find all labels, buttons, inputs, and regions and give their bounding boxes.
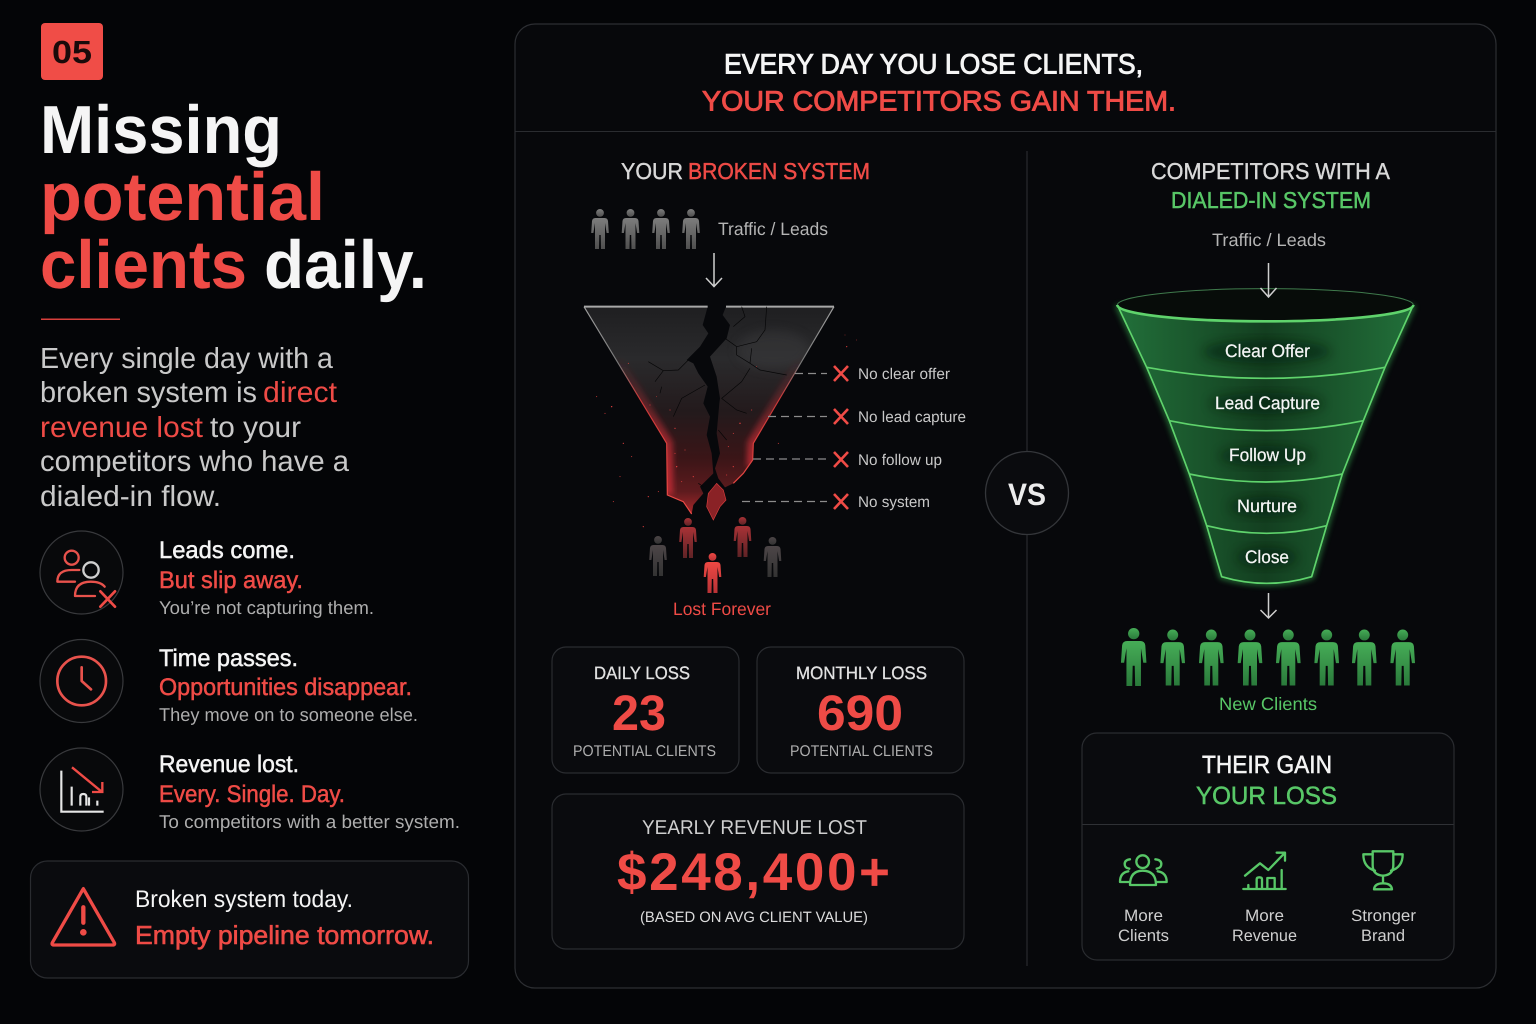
- item: revenue lost: Every. Single. Day.: [159, 781, 345, 808]
- main panel: [515, 24, 1496, 988]
- label: new clients: New Clients: [1219, 694, 1317, 714]
- traffic people, grey: [591, 209, 700, 249]
- panel heading: YOUR COMPETITORS GAIN THEM.: [702, 86, 1176, 116]
- title: Missing: [40, 92, 282, 168]
- arrow: out of green funnel: [1260, 593, 1276, 618]
- stat card: yearly revenue lost: [552, 794, 964, 949]
- label: traffic leads: Traffic / Leads: [718, 219, 828, 239]
- callout: warning: Broken system today.: [135, 886, 353, 913]
- lost people: [649, 517, 781, 593]
- intro paragraph: dialed-in flow.: [40, 481, 221, 513]
- item: opportunities disappear: Opportunities disappear.: [159, 674, 412, 701]
- heading: broken system: YOUR: [621, 158, 683, 184]
- stat card: yearly revenue lost: $248,400+: [617, 843, 890, 902]
- item: revenue lost: To competitors with a better system.: [159, 811, 460, 832]
- panel heading: EVERY DAY YOU LOSE CLIENTS,: [724, 48, 1143, 80]
- intro paragraph: direct: [263, 377, 337, 409]
- section number badge: 05: [52, 34, 92, 70]
- broken funnel: [584, 307, 857, 527]
- funnel stages: Lead Capture: [1215, 393, 1320, 413]
- intro paragraph: Every single day with a: [40, 343, 334, 375]
- label: lost forever: Lost Forever: [673, 599, 771, 619]
- funnel stages: Nurture: [1237, 496, 1297, 516]
- title: clients: [40, 227, 247, 303]
- intro paragraph: to your: [210, 412, 301, 444]
- panel: their gain: THEIR GAIN: [1202, 751, 1332, 779]
- funnel stages: [1215, 341, 1320, 567]
- panel: their gain: Clients: [1118, 927, 1169, 945]
- funnel stages: Close: [1245, 547, 1289, 567]
- stat card: daily loss: DAILY LOSS: [594, 663, 690, 683]
- panel: their gain: Brand: [1361, 927, 1405, 945]
- stat card: daily loss: 23: [612, 685, 666, 741]
- leak reasons: No clear offer: [858, 366, 950, 383]
- item: leads slip away: You’re not capturing them.: [159, 597, 374, 618]
- item: leads slip away: [40, 531, 374, 618]
- funnel stages: Clear Offer: [1225, 341, 1310, 361]
- title: [40, 92, 427, 303]
- stat card: monthly loss: POTENTIAL CLIENTS: [790, 743, 933, 760]
- title: daily.: [264, 227, 427, 303]
- green funnel: [1117, 289, 1413, 583]
- panel: their gain: More: [1124, 907, 1163, 925]
- stat card: monthly loss: MONTHLY LOSS: [796, 663, 927, 683]
- intro paragraph: broken system is: [40, 377, 257, 409]
- leak reasons: No system: [858, 494, 930, 511]
- icon: clock: [40, 640, 123, 722]
- icon: falling chart: [40, 748, 123, 831]
- stat card: daily loss: [552, 647, 739, 773]
- item: leads slip away: Leads come.: [159, 537, 295, 564]
- heading: broken system: [621, 158, 870, 184]
- panel: their gain: Stronger: [1351, 907, 1417, 925]
- heading: competitors: [1151, 158, 1391, 213]
- item: opportunities disappear: Time passes.: [159, 645, 298, 672]
- item: revenue lost: Revenue lost.: [159, 751, 299, 778]
- VS badge: VS: [1008, 477, 1046, 512]
- icon: leads lost: [40, 531, 123, 614]
- arrow: into broken funnel: [706, 253, 722, 286]
- VS badge: [986, 452, 1068, 534]
- leak reasons: No follow up: [858, 452, 942, 469]
- item: opportunities disappear: [40, 640, 418, 725]
- stat card: monthly loss: [757, 647, 964, 773]
- icon: more clients: [1120, 855, 1167, 885]
- item: opportunities disappear: They move on to someone else.: [159, 704, 418, 725]
- icon: stronger brand: [1363, 851, 1403, 889]
- intro paragraph: competitors who have a: [40, 446, 350, 478]
- leak reasons: No lead capture: [858, 409, 966, 426]
- arrow: into green funnel: [1260, 263, 1276, 297]
- new clients people: [1121, 628, 1415, 686]
- stat card: daily loss: POTENTIAL CLIENTS: [573, 743, 716, 760]
- callout: warning: Empty pipeline tomorrow.: [135, 920, 434, 950]
- funnel stages: Follow Up: [1229, 445, 1306, 465]
- stat card: yearly revenue lost: (BASED ON AVG CLIENT VALUE): [640, 909, 868, 926]
- heading: competitors: DIALED-IN SYSTEM: [1171, 187, 1371, 213]
- title: potential: [40, 159, 325, 235]
- icon: warning triangle: [52, 889, 115, 945]
- leak reasons: [742, 366, 966, 511]
- panel: their gain: [1082, 733, 1454, 960]
- item: revenue lost: [40, 748, 460, 832]
- item: leads slip away: But slip away.: [159, 567, 303, 594]
- icon: more revenue: [1243, 853, 1286, 889]
- callout: warning: [30, 861, 468, 978]
- panel: their gain: Revenue: [1232, 927, 1297, 945]
- icon: red crosses: [834, 366, 848, 509]
- panel: their gain: More: [1245, 907, 1284, 925]
- panel heading: [702, 48, 1176, 116]
- intro paragraph: revenue lost: [40, 412, 203, 444]
- intro paragraph: [40, 343, 350, 513]
- label: traffic leads right: Traffic / Leads: [1212, 230, 1326, 250]
- heading: competitors: COMPETITORS WITH A: [1151, 158, 1391, 184]
- stat card: monthly loss: 690: [817, 685, 903, 741]
- panel: their gain: YOUR LOSS: [1196, 782, 1337, 810]
- stat card: yearly revenue lost: YEARLY REVENUE LOST: [642, 817, 867, 839]
- heading: broken system: BROKEN SYSTEM: [688, 158, 870, 184]
- section number badge: [41, 23, 103, 80]
